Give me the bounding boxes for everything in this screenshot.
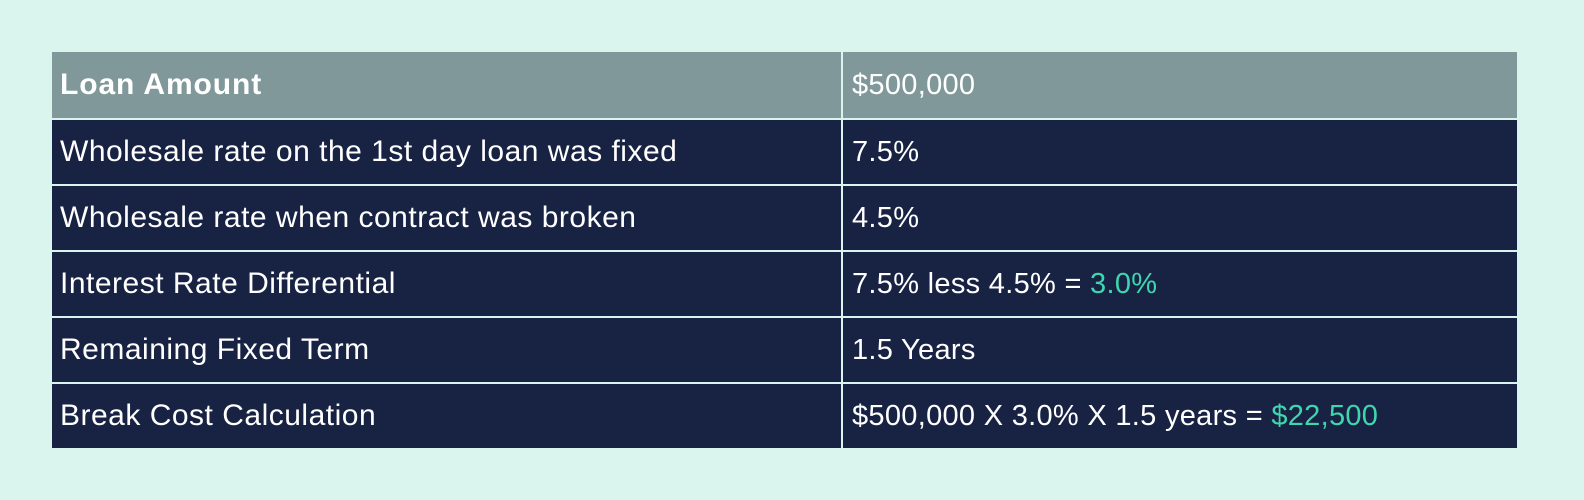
header row: loan amount: Loan Amount [60,68,262,101]
header row: loan amount [52,52,1517,118]
row: interest rate differential: 3.0% [1090,268,1157,300]
row: remaining fixed term [52,318,1517,382]
header row: loan amount: $500,000 [852,68,975,100]
row: break cost calculation [52,384,1517,448]
row: wholesale rate broken: Wholesale rate when contract was broken [60,201,636,234]
row: wholesale rate broken [52,186,1517,250]
row: wholesale rate fixed: 7.5% [852,136,919,168]
row: break cost calculation: $22,500 [1271,400,1378,432]
row: wholesale rate fixed: Wholesale rate on the 1st day loan was fixed [60,135,677,168]
row: interest rate differential: 7.5% less 4.5% = [852,268,1082,300]
row: wholesale rate fixed [52,120,1517,184]
row: break cost calculation: $500,000 X 3.0% X 1.5 years = [852,400,1263,432]
row: break cost calculation: Break Cost Calculation [60,399,376,432]
row: wholesale rate broken: 4.5% [852,202,919,234]
row: interest rate differential: Interest Rate Differential [60,267,396,300]
row: remaining fixed term: Remaining Fixed Term [60,333,370,366]
table: break cost calculation [52,52,1517,448]
row: interest rate differential [52,252,1517,316]
row: remaining fixed term: 1.5 Years [852,334,976,366]
